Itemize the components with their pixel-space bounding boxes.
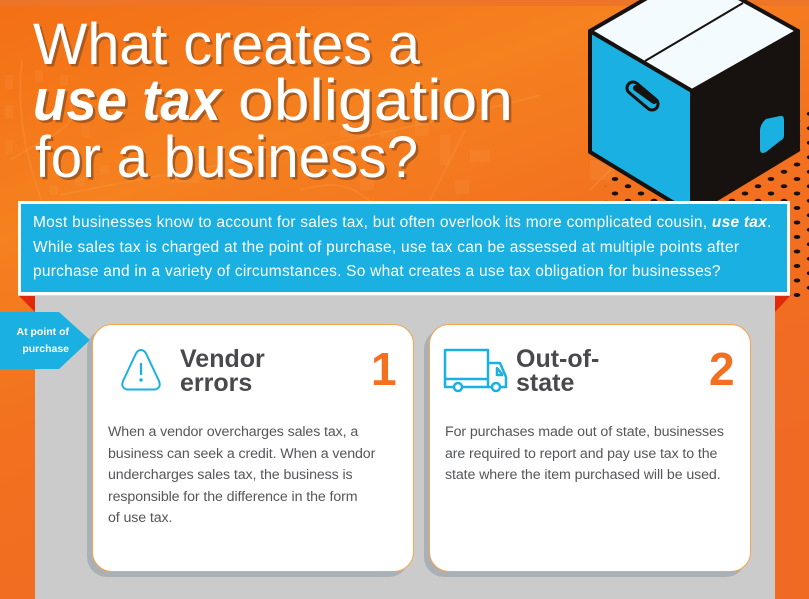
- icon: cardboard box: [588, 0, 800, 201]
- heading: vendor errors: Vendor: [180, 345, 265, 373]
- number 1: 1: [371, 343, 397, 395]
- heading: vendor errors: [180, 345, 265, 396]
- body: out of state: are required to report and pay use tax to the: [445, 446, 717, 462]
- tag: at point of purchase: [0, 312, 90, 369]
- card 2: out of state: [429, 324, 751, 572]
- grey content panel: [35, 295, 775, 599]
- dot pattern: [605, 112, 809, 205]
- body: vendor errors: responsible for the difference in the form: [108, 488, 357, 504]
- icon: warning triangle: [121, 349, 161, 390]
- icon: box label: [760, 116, 784, 153]
- heading: out of state: [516, 345, 599, 396]
- title: for a business?: [35, 125, 418, 190]
- title: use tax: [33, 68, 224, 133]
- title: What creates a: [33, 12, 421, 77]
- body: vendor errors: When a vendor overcharges sales tax, a: [108, 424, 358, 440]
- number 2: 2: [709, 343, 735, 395]
- body: vendor errors: undercharges sales tax, the business is: [108, 467, 353, 483]
- tag: at point of purchase: purchase: [22, 343, 69, 355]
- title: obligation: [238, 68, 513, 133]
- tag: at point of purchase: At point of: [17, 326, 69, 338]
- title: [33, 12, 516, 192]
- heading: out of state: state: [516, 368, 574, 396]
- intro text: Most businesses know to account for sales tax, but often overlook its more complicated cousin, use tax.: [33, 214, 772, 231]
- body: vendor errors: [108, 424, 376, 526]
- heading: vendor errors: errors: [180, 368, 252, 396]
- icon: delivery truck: [444, 348, 508, 392]
- icon: box handle: [633, 88, 654, 104]
- body: vendor errors: business can seek a credit. When a vendor: [108, 446, 375, 462]
- intro text: While sales tax is charged at the point of purchase, use tax can be assessed at multiple points after: [33, 239, 739, 256]
- heading: out of state: Out-of-: [516, 345, 599, 373]
- title: for a business?: [38, 128, 420, 192]
- body: out of state: state where the item purchased will be used.: [445, 467, 721, 483]
- card 1: vendor errors: [92, 324, 414, 572]
- title: What creates a: [36, 14, 423, 80]
- intro text: [33, 214, 772, 280]
- title: obligation: [240, 70, 516, 136]
- body: out of state: [445, 424, 724, 483]
- title: use tax: [36, 70, 226, 136]
- intro band: [18, 201, 790, 295]
- body: vendor errors: of use tax.: [108, 510, 172, 526]
- intro text: purchase and in a variety of circumstances. So what creates a use tax obligation for businesses?: [33, 263, 721, 280]
- body: out of state: For purchases made out of state, businesses: [445, 424, 724, 440]
- fold triangles: [19, 295, 791, 312]
